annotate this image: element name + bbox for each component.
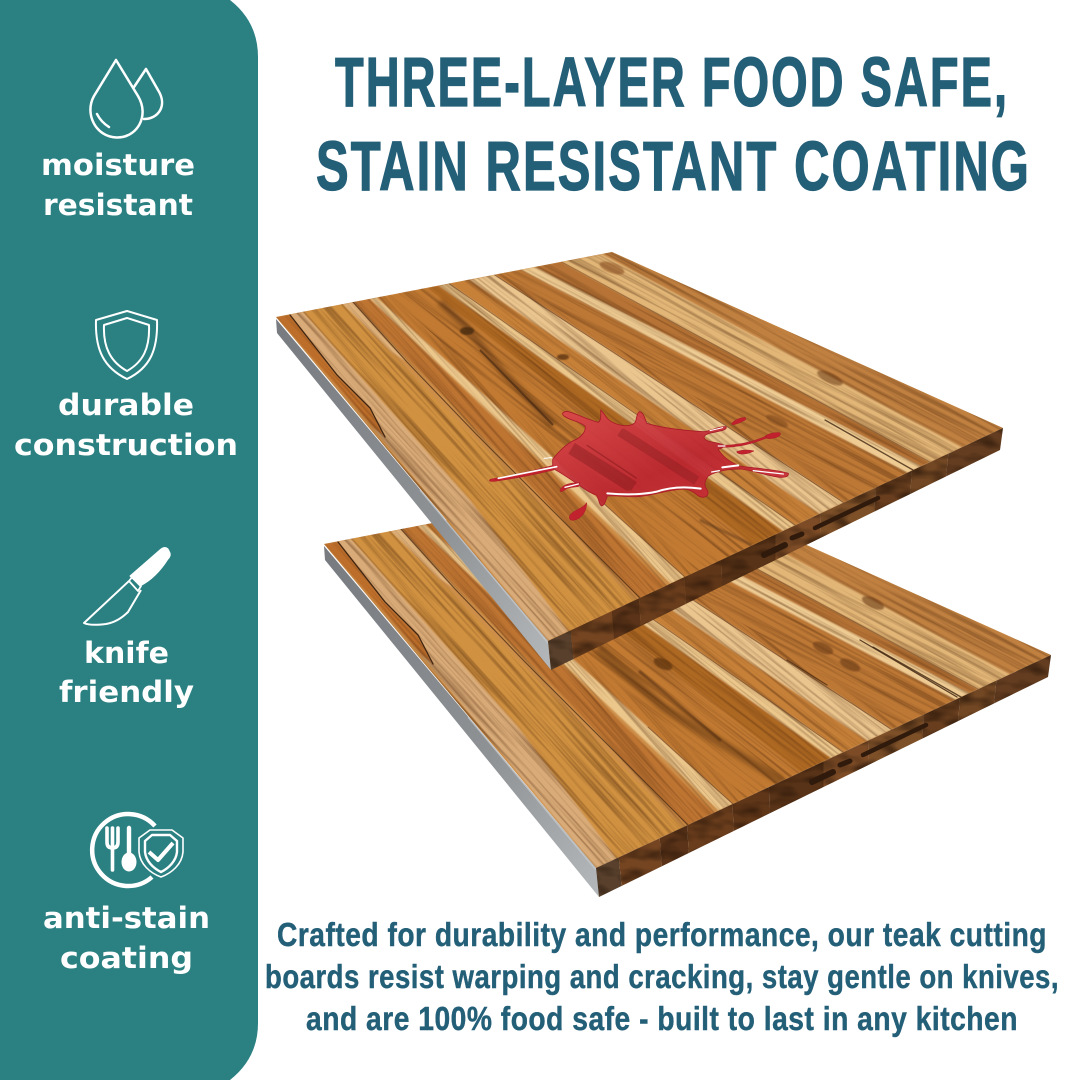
label: knife friendly: knife [84, 636, 169, 670]
panel: teal feature sidebar [0, 0, 258, 1080]
description text [265, 917, 1059, 1038]
icon: water drops [90, 60, 162, 138]
upper board top face [218, 164, 1039, 744]
label: knife friendly [59, 636, 194, 709]
label: moisture resistant: moisture [41, 148, 195, 182]
upper board grain details [440, 259, 845, 545]
splat droplets and threads [489, 417, 781, 520]
feature: durable construction [14, 311, 238, 462]
icon: knife [84, 548, 170, 625]
label: durable construction: construction [14, 428, 238, 462]
title [316, 43, 1031, 205]
label: durable construction [14, 388, 238, 462]
lower board top face [266, 391, 1080, 971]
lower board side and front edges [324, 546, 1068, 907]
lower board grain details [600, 593, 957, 780]
label: moisture resistant [41, 148, 195, 222]
upper board side and front edges [276, 319, 1020, 680]
label: anti-stain coating [43, 901, 210, 975]
icon: shield [96, 311, 157, 379]
feature: knife friendly [59, 548, 194, 709]
upper teak cutting board [276, 252, 1003, 670]
label: anti-stain coating: anti-stain [43, 901, 210, 935]
label: anti-stain coating: coating [60, 941, 193, 975]
feature: moisture resistant [41, 60, 195, 222]
sidebar background [0, 0, 258, 1080]
feature: anti-stain coating [43, 814, 210, 975]
splat glossy highlights [498, 428, 783, 494]
lower teak cutting board [266, 391, 1080, 971]
red liquid splat beading on the board [489, 410, 788, 520]
label: durable construction: durable [58, 388, 194, 422]
label: knife friendly: friendly [59, 675, 194, 709]
splat body [553, 410, 788, 506]
icon: cutlery and shield check [92, 814, 183, 886]
label: moisture resistant: resistant [43, 188, 193, 222]
splat darker grain showing through [572, 432, 697, 487]
